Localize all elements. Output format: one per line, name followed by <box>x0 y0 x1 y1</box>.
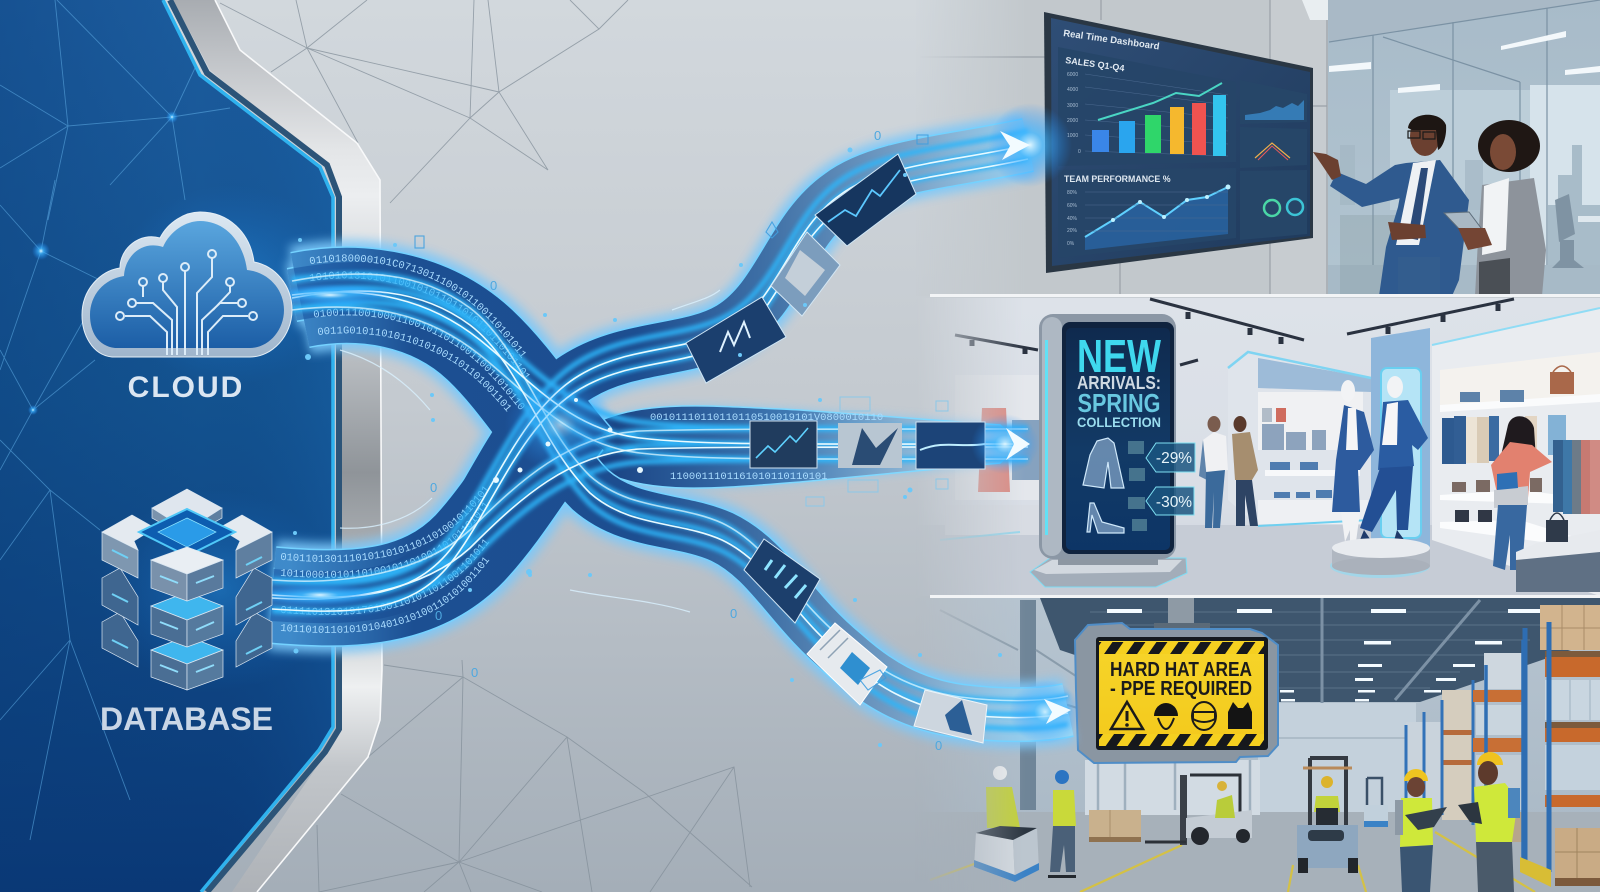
dashboard title: Real Time Dashboard <box>1063 28 1160 52</box>
sign text: - PPE REQUIRED <box>1110 678 1252 700</box>
side arcs <box>340 290 720 612</box>
data cards: top stream <box>686 154 916 383</box>
team performance panel: 80% <box>1067 190 1078 196</box>
pedestal <box>1330 538 1430 578</box>
people: presenter and colleague <box>1313 115 1546 296</box>
side panels <box>1240 100 1307 240</box>
team performance panel: 60% <box>1067 203 1078 209</box>
ceiling lights <box>1107 609 1546 702</box>
left column <box>102 515 155 667</box>
bars <box>1092 95 1226 156</box>
floating digits <box>430 128 942 753</box>
binary text: 01001110010001100101101100110011010110 <box>314 308 524 410</box>
dashboard monitor <box>1044 12 1313 273</box>
sales panel: 6000 <box>1067 72 1078 78</box>
blue light lines <box>272 131 1068 729</box>
forklift side <box>1145 775 1252 845</box>
headline text <box>1077 340 1161 427</box>
worker on robot cart <box>974 766 1039 882</box>
sales panel: SALES Q1-Q4 <box>1065 55 1125 73</box>
icon: high heel <box>1087 503 1124 533</box>
icon: cloud <box>82 212 292 357</box>
team performance panel <box>1064 176 1230 250</box>
scene: dashboard office <box>900 0 1600 296</box>
sign text: HARD HAT AREA <box>1110 659 1252 681</box>
floating digits: 0 <box>490 278 497 293</box>
concrete wall <box>930 0 1328 294</box>
worker with clipboard <box>1048 770 1076 878</box>
shopper at rack <box>1491 416 1552 570</box>
sales panel: 4000 <box>1067 87 1078 93</box>
network lines <box>0 0 230 840</box>
sales panel: 3000 <box>1067 103 1078 109</box>
floating digits: 0 <box>430 480 437 495</box>
hall structure <box>900 598 1600 892</box>
binary text: 0101101301110101101011011010010110101 <box>281 486 488 562</box>
source beams <box>258 284 615 607</box>
sales panel <box>1058 47 1228 156</box>
icon: hard hat <box>1154 703 1178 729</box>
store background <box>900 298 1600 596</box>
headline text: NEW <box>1077 330 1161 382</box>
binary text: 0011G01011010110101001101101001101 <box>318 326 511 412</box>
counter with bag <box>1516 513 1600 592</box>
floating digits: 0 <box>471 665 478 680</box>
back block <box>152 489 222 530</box>
icon: safety vest <box>1228 702 1252 729</box>
icon: database cube <box>102 489 272 690</box>
scene: retail store <box>900 298 1600 596</box>
storage racks <box>1406 605 1600 887</box>
team performance panel: TEAM PERFORMANCE % <box>1064 174 1171 184</box>
boxes on pallet <box>1089 810 1141 842</box>
arrow: to dashboard <box>988 103 1072 187</box>
sales panel: 1000 <box>1067 133 1078 139</box>
binary text: 1011010110101010401010100110101001101 <box>280 557 490 633</box>
front column <box>151 547 223 690</box>
distant forklift <box>1364 778 1388 827</box>
headline text: SPRING <box>1078 388 1160 418</box>
floating digits: 0 <box>874 128 881 143</box>
circuit traces <box>116 250 257 355</box>
headline text: COLLECTION <box>1077 415 1161 430</box>
binary text: 1100011101161010110110101 <box>670 471 828 483</box>
office behind glass <box>1328 0 1600 296</box>
mannequins <box>1332 376 1428 548</box>
team performance panel: 40% <box>1067 216 1078 222</box>
sales panel: 0 <box>1078 149 1081 155</box>
divider lines <box>930 294 1600 598</box>
data streams <box>264 109 1080 754</box>
floating digits: 0 <box>730 606 737 621</box>
panel: data sources <box>0 0 345 892</box>
data cards: lower stream <box>744 539 987 743</box>
silver frame band <box>173 0 382 892</box>
hazard sign <box>1075 598 1278 763</box>
stream edges <box>272 145 1068 715</box>
right wall shelves <box>1432 308 1600 596</box>
small icons <box>1128 441 1147 531</box>
discount tag 29 <box>1146 443 1195 472</box>
icon: goggles <box>1192 702 1216 730</box>
digital kiosk <box>1030 314 1195 587</box>
right column <box>219 515 272 667</box>
icon: warning triangle <box>1111 702 1143 729</box>
binary text <box>240 213 916 676</box>
couple <box>1199 416 1258 528</box>
background polygon lines <box>220 0 752 892</box>
team performance panel: 0% <box>1067 241 1075 247</box>
binary text: 0111101310191701001101011011001101011 <box>281 539 490 615</box>
stream outer glow <box>272 145 1068 715</box>
middle band <box>590 406 1020 488</box>
icon: jacket <box>1083 438 1124 488</box>
particles <box>293 148 1002 747</box>
data cards: middle stream <box>750 421 985 469</box>
label: database: DATABASE <box>100 701 273 737</box>
scene: warehouse <box>900 598 1600 892</box>
small stream glyphs <box>415 135 948 690</box>
worker with tablet yellow helmet <box>1395 769 1447 892</box>
ceiling track lights <box>955 299 1514 365</box>
centre chip <box>139 509 235 556</box>
discount tag 29: -29% <box>1156 450 1192 467</box>
floating digits: 0 <box>435 608 442 623</box>
arrow: to store display <box>971 414 1039 474</box>
sales panel: 2000 <box>1067 118 1078 124</box>
arrow: to hazard sign <box>1009 680 1081 744</box>
floating digits: 0 <box>935 738 942 753</box>
stream bands <box>272 145 1068 715</box>
discount tag 30 <box>1146 487 1194 515</box>
sign text <box>1110 659 1252 700</box>
centre display shelving <box>1228 352 1371 526</box>
binary text: 1011000101011010010110100110101101011 <box>280 502 490 578</box>
worker with tablet right <box>1458 752 1520 892</box>
team performance panel: 20% <box>1067 228 1078 234</box>
binary text: 00101110110110110510019101V0800010110 <box>650 412 883 424</box>
discount tag 30: -30% <box>1156 494 1192 511</box>
headline text: ARRIVALS: <box>1077 373 1161 393</box>
binary text: 0110180000101C0713011100101100110101011 <box>310 254 526 358</box>
white light lines <box>272 145 1068 718</box>
binary text: 1010101310101100101011011010110110101101 <box>310 271 530 378</box>
forklift front <box>1297 758 1358 873</box>
blue column with mirror <box>1371 328 1430 548</box>
label: cloud: CLOUD <box>128 371 244 404</box>
